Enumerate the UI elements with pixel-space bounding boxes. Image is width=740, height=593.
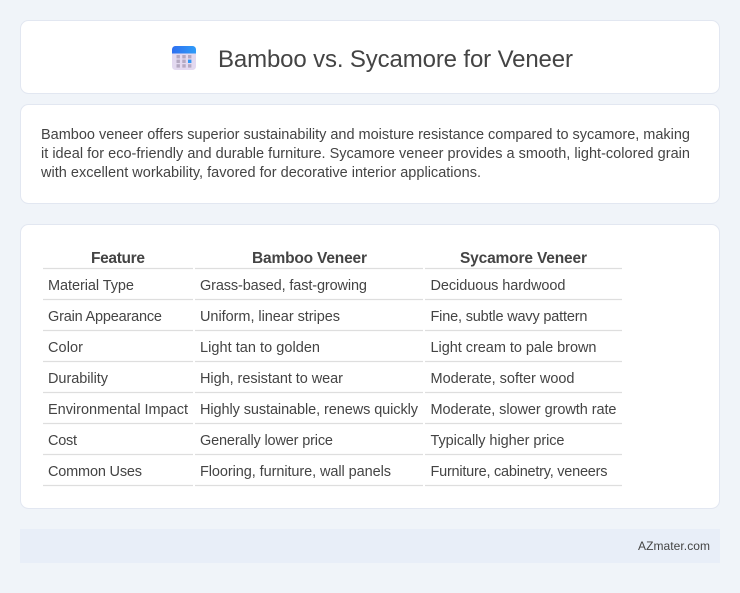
footer credit: AZmater.com [638,539,710,553]
table header: Feature [91,250,145,267]
row: durability: Moderate, softer wood [430,371,574,387]
row: material type: Grass-based, fast-growing [200,278,367,294]
row: cost: Cost [48,433,77,449]
panel: title card [20,20,720,94]
row: material type [48,278,566,294]
row: grain appearance [48,309,588,325]
table header: Sycamore Veneer [460,250,587,267]
text block: summary [40,127,690,181]
icon: calendar [172,46,196,70]
title: Bamboo vs. Sycamore for Veneer [218,46,573,73]
text block: summary: it ideal for eco-friendly and durable furniture. Sycamore veneer provides a smooth, light-colored grain [41,146,690,162]
row: cost: Typically higher price [430,433,564,449]
panel: intro text [20,104,720,204]
panel: comparison table [20,224,720,508]
row: material type: Deciduous hardwood [430,278,566,294]
row: cost [48,433,564,449]
row: common uses: Flooring, furniture, wall panels [200,464,391,480]
row: grain appearance: Grain Appearance [48,309,162,325]
row: common uses [48,464,608,480]
row: environmental impact: Highly sustainable, renews quickly [200,402,419,418]
row: color: Light cream to pale brown [430,340,596,356]
table header [91,250,587,267]
row: durability: High, resistant to wear [200,371,343,387]
row: color [48,340,596,356]
row: durability: Durability [48,371,109,387]
row: grain appearance: Fine, subtle wavy pattern [430,309,588,325]
table header: Bamboo Veneer [252,250,367,267]
row: material type: Material Type [48,278,134,294]
row: environmental impact: Moderate, slower growth rate [430,402,616,418]
row: environmental impact: Environmental Impact [48,402,188,418]
text block: summary: with excellent workability, favored for decorative interior applications. [40,165,481,181]
row: environmental impact [48,402,616,418]
text block: summary: Bamboo veneer offers superior sustainability and moisture resistance compared to sycamore, making [41,127,690,143]
row: grain appearance: Uniform, linear stripes [200,309,340,325]
row: color: Color [48,340,83,356]
row: cost: Generally lower price [200,433,333,449]
row: common uses: Furniture, cabinetry, veneers [430,464,608,480]
footer [20,529,720,563]
row: color: Light tan to golden [200,340,320,356]
row: common uses: Common Uses [48,464,142,480]
row: durability [48,371,574,387]
